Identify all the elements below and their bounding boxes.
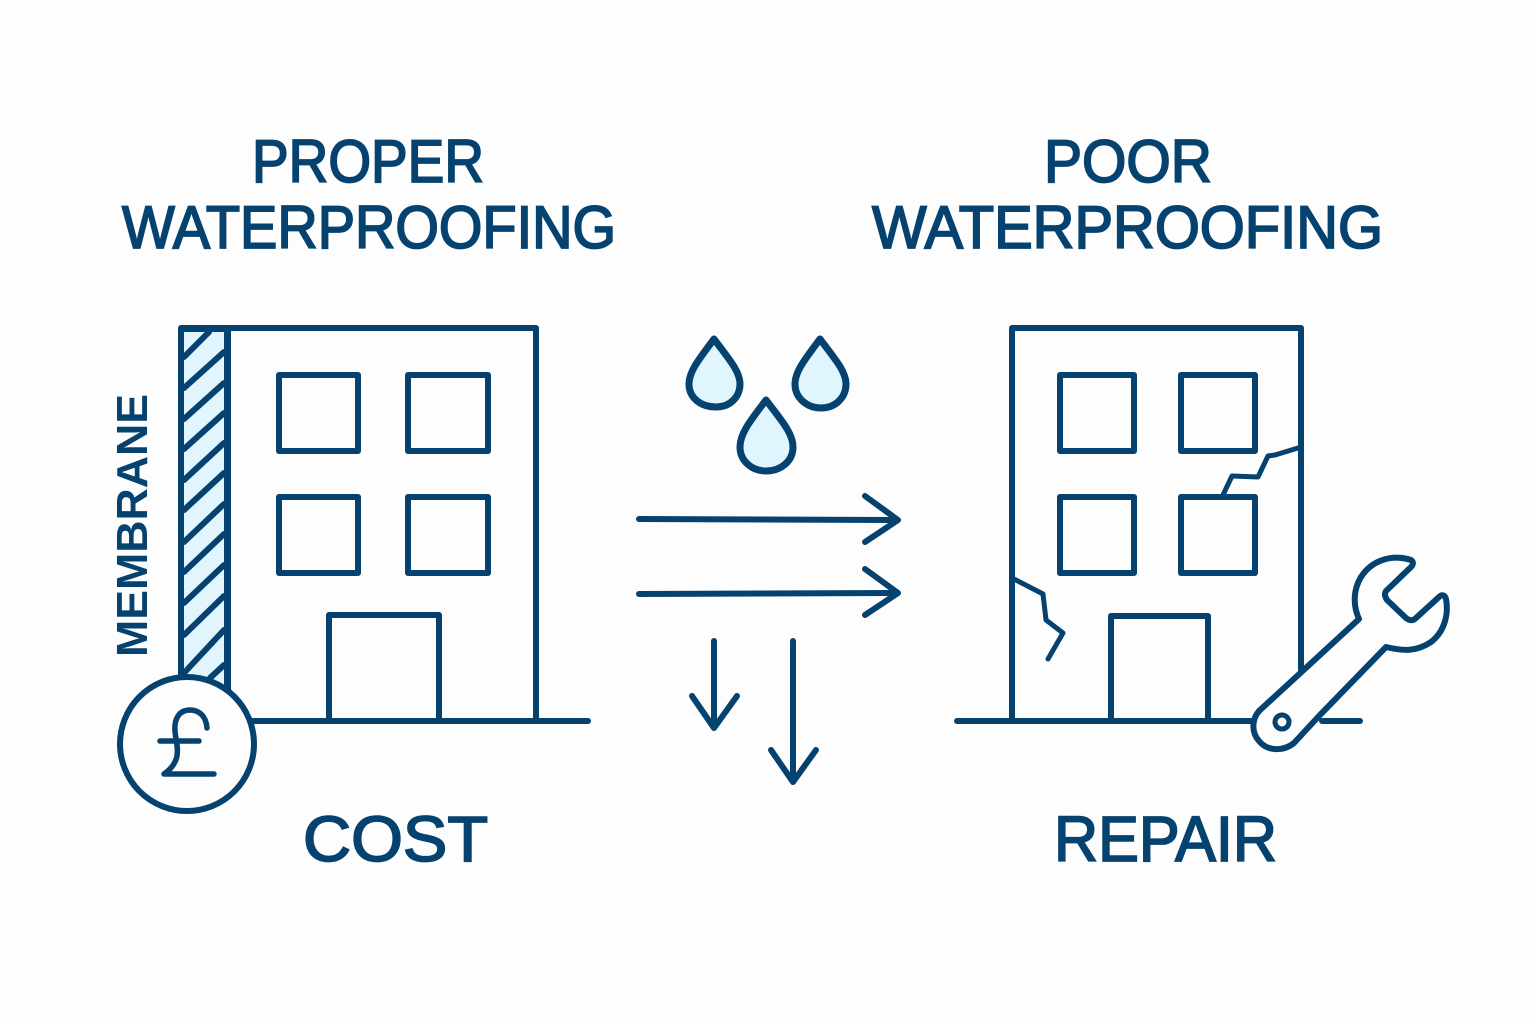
arrows: downward xyxy=(692,641,816,782)
building outline xyxy=(1012,328,1301,721)
crack: lower left xyxy=(1014,579,1063,659)
icon: wrench xyxy=(1253,558,1447,749)
door xyxy=(329,615,439,721)
heading: poor waterproofing xyxy=(872,128,1383,261)
building: poor waterproofing xyxy=(957,328,1360,721)
heading: proper waterproofing: WATERPROOFING xyxy=(122,194,616,261)
ground line xyxy=(957,718,1360,724)
ground line xyxy=(250,718,588,724)
heading: proper waterproofing xyxy=(122,128,616,261)
icon: pound coin xyxy=(120,677,254,811)
building: proper waterproofing xyxy=(181,328,588,721)
heading: proper waterproofing: PROPER xyxy=(252,128,484,195)
wrench hole xyxy=(1275,715,1289,729)
label: cost: COST xyxy=(303,803,488,875)
windows xyxy=(279,375,488,573)
heading: poor waterproofing: WATERPROOFING xyxy=(872,194,1383,261)
icon: water drops xyxy=(689,339,846,471)
membrane layer xyxy=(181,329,227,699)
arrows: horizontal xyxy=(639,496,898,615)
door xyxy=(1111,616,1208,721)
crack: upper right xyxy=(1223,448,1298,495)
windows xyxy=(1060,375,1255,573)
label: membrane: MEMBRANE xyxy=(108,394,157,657)
building outline xyxy=(181,328,536,721)
heading: poor waterproofing: POOR xyxy=(1044,128,1212,195)
label: repair: REPAIR xyxy=(1054,803,1277,875)
